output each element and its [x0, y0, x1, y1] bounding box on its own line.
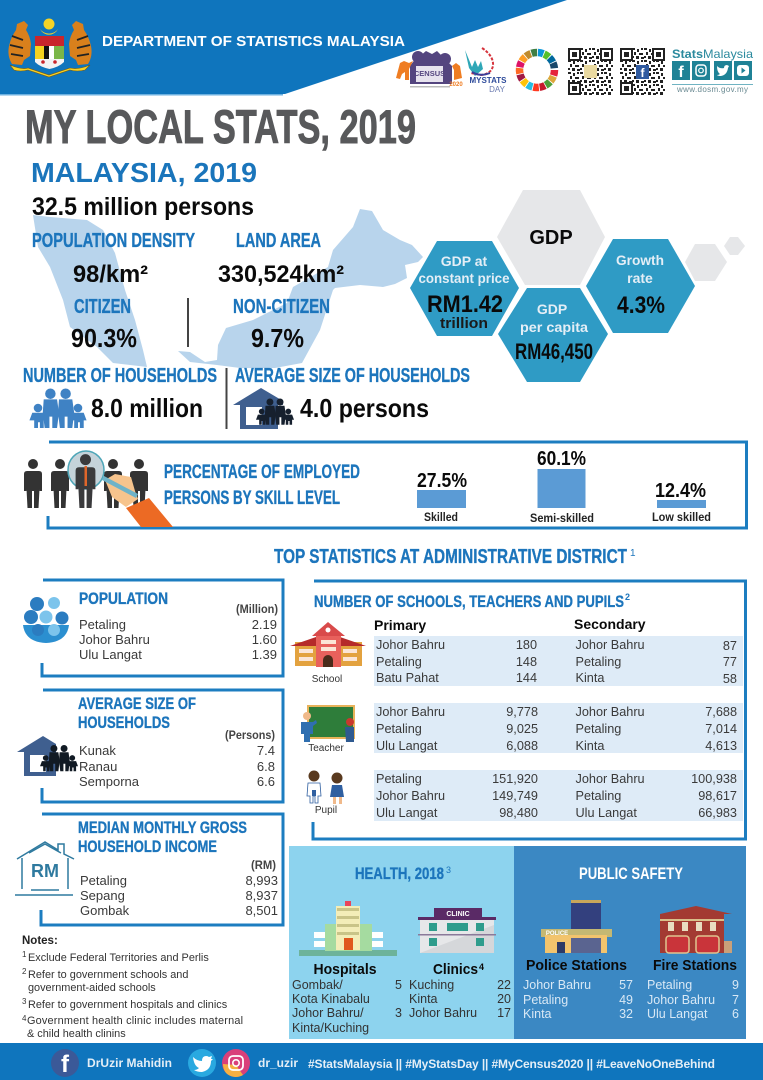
list: police stations: 32 [619, 1007, 633, 1021]
panel: average size of households: HOUSEHOLDS [78, 713, 170, 732]
data rows: Petaling [80, 873, 127, 888]
panel: schools, teachers and pupils: Secondary [574, 616, 646, 632]
notes [22, 935, 243, 1040]
list: hospitals: Kinta/Kuching [292, 1021, 369, 1035]
StatsMalaysia social block: f [678, 64, 684, 81]
hexagon: growth rate: rate [627, 270, 653, 286]
StatsMalaysia social block: StatsMalaysia [672, 47, 753, 61]
icon: RM house [15, 842, 74, 895]
icon: twitter [188, 1049, 216, 1077]
icon: school [290, 622, 366, 667]
bar: skilled [417, 470, 467, 524]
icon: house with family [233, 388, 294, 429]
icon: facebook: f [61, 1051, 70, 1078]
panel: median household income: HOUSEHOLD INCOME [78, 837, 217, 856]
list: police stations: Johor Bahru [523, 978, 591, 992]
table: schools: 58 [723, 672, 737, 686]
data rows: 8,937 [245, 888, 278, 903]
data rows: 6.6 [257, 774, 275, 789]
footer bar: DrUzir Mahidin [87, 1056, 172, 1070]
table: teachers: 6,088 [506, 739, 538, 753]
stat: land area [218, 230, 344, 288]
list: fire stations: 9 [732, 978, 739, 992]
icon: hospital [299, 901, 397, 956]
data rows: Ranau [79, 759, 117, 774]
panel: public safety: Police Stations [526, 957, 627, 974]
stat: number of households [23, 365, 217, 428]
stat: non-citizen [233, 296, 330, 353]
header logos [396, 45, 753, 95]
panel: average size of households: AVERAGE SIZE OF [78, 694, 196, 713]
table: teachers: 7,014 [705, 722, 737, 736]
table: teachers: Ulu Langat [376, 739, 438, 753]
notes: Government health clinic includes maternal [27, 1015, 243, 1027]
list: clinics: Kinta [409, 992, 438, 1006]
StatsMalaysia social block: www.dosm.gov.my [676, 85, 748, 94]
stat: number of households: 8.0 million [91, 393, 203, 423]
list: fire stations: 6 [732, 1007, 739, 1021]
table: teachers: Johor Bahru [376, 705, 445, 719]
bar: skilled: Skilled [424, 510, 458, 524]
bar: low skilled [652, 480, 711, 524]
panel: health: Hospitals [314, 961, 376, 978]
icon: MyStats Day logo: DAY [489, 85, 506, 94]
stat: population density [32, 230, 195, 288]
list: fire stations: Ulu Langat [647, 1007, 708, 1021]
data rows: 7.4 [257, 743, 275, 758]
list: fire stations: Johor Bahru [647, 993, 715, 1007]
population total: 32.5 million persons [32, 193, 254, 221]
panel: population: (Million) [236, 602, 278, 616]
hexagon: GDP title: GDP [529, 227, 573, 249]
table: pupils: 149,749 [492, 789, 538, 803]
table: schools: 180 [516, 638, 537, 652]
panel: schools, teachers and pupils: Primary [374, 617, 426, 633]
hexagon: GDP per capita [498, 288, 608, 382]
table: teachers [376, 705, 737, 753]
table: pupils: 98,480 [499, 806, 538, 820]
list: police stations: Kinta [523, 1007, 552, 1021]
data rows: 6.8 [257, 759, 275, 774]
notes: Refer to government schools and [28, 969, 188, 981]
bar: semi-skilled [530, 448, 594, 525]
heading: NUMBER OF SCHOOLS, TEACHERS AND PUPILS [314, 592, 624, 611]
list: clinics [409, 978, 511, 1020]
table: schools [376, 638, 737, 686]
panel: population [23, 580, 283, 676]
data rows [79, 743, 275, 789]
stat: citizen [71, 296, 137, 353]
list: clinics: 22 [497, 978, 511, 992]
hexagon: GDP title [497, 190, 605, 285]
stat: population density: POPULATION DENSITY [32, 230, 195, 252]
notes: 4 [22, 1014, 27, 1023]
list: fire stations: Petaling [647, 978, 692, 992]
icon: teacher [301, 705, 355, 742]
panel: average size of households [17, 690, 283, 802]
hexagon: GDP at constant price: trillion [440, 315, 488, 332]
hexagon: growth rate [586, 239, 695, 333]
heading: 2 [625, 592, 630, 602]
table: schools: Johor Bahru [576, 638, 645, 652]
panel: schools, teachers and pupils: Teacher [308, 743, 344, 754]
organisation name: DEPARTMENT OF STATISTICS MALAYSIA [102, 33, 405, 50]
data rows [80, 873, 278, 918]
hexagon: GDP at constant price: GDP at [441, 253, 488, 269]
list: police stations: 57 [619, 978, 633, 992]
stat: average size of households: 4.0 persons [300, 393, 429, 423]
hexagon: growth rate: Growth [616, 252, 664, 268]
stat: land area: LAND AREA [236, 230, 321, 252]
table: schools: 77 [723, 655, 737, 669]
list: clinics: Kuching [409, 978, 454, 992]
hexagon: GDP at constant price: RM1.42 [427, 291, 503, 318]
panel: median household income: (RM) [251, 858, 276, 872]
hexagon: GDP per capita: GDP [537, 301, 567, 317]
icon: fire station [660, 906, 732, 953]
icon: clinic: CLINIC [446, 911, 470, 918]
bar: low skilled: 12.4% [655, 480, 706, 502]
notes: Refer to government hospitals and clinics [28, 999, 228, 1011]
table: pupils: Petaling [576, 789, 621, 803]
table: schools: Petaling [576, 655, 621, 669]
data rows: Semporna [79, 774, 140, 789]
icon: police station [541, 900, 612, 953]
icon: RM house: RM [31, 861, 59, 881]
table: schools: Petaling [376, 655, 422, 669]
bar: low skilled: Low skilled [652, 510, 711, 524]
icon: national crest [8, 18, 92, 77]
panel: median household income [15, 814, 283, 925]
GDP hexagon cluster [410, 190, 745, 382]
panel: health [289, 846, 514, 1039]
notes: Notes: [22, 935, 58, 947]
list: hospitals: 3 [395, 1006, 402, 1020]
icon: QR code website [568, 48, 613, 95]
stat: citizen: 90.3% [71, 323, 137, 353]
table: pupils: 151,920 [492, 772, 538, 786]
table: pupils: Ulu Langat [576, 806, 637, 820]
list: police stations [523, 978, 633, 1021]
bar: semi-skilled: 60.1% [537, 448, 586, 470]
panel: schools, teachers and pupils [290, 581, 746, 839]
panel: schools, teachers and pupils: School [312, 674, 342, 685]
heading: PERSONS BY SKILL LEVEL [164, 488, 340, 509]
notes: 3 [22, 997, 27, 1006]
table: pupils [376, 772, 737, 820]
table: teachers: Petaling [376, 722, 422, 736]
footer bar: #StatsMalaysia || #MyStatsDay || #MyCensus2020 || #LeaveNoOneBehind [308, 1057, 715, 1071]
panel: average size of households: (Persons) [225, 728, 275, 742]
data rows: Sepang [80, 888, 125, 903]
StatsMalaysia social block [672, 47, 753, 94]
data rows: Petaling [79, 617, 126, 632]
heading: PERCENTAGE OF EMPLOYED [164, 462, 360, 483]
hexagon: GDP at constant price: constant price [418, 270, 510, 286]
table: schools: 87 [723, 639, 737, 653]
table: teachers: 4,613 [705, 739, 737, 753]
table: schools: Batu Pahat [376, 671, 439, 685]
bar chart [417, 448, 711, 525]
data rows: Johor Bahru [79, 632, 150, 647]
icon: house with family [17, 736, 78, 776]
map of Malaysia [33, 209, 423, 368]
data rows: Ulu Langat [79, 647, 142, 662]
hexagon: GDP per capita: per capita [520, 319, 588, 335]
table: teachers: 9,025 [506, 722, 538, 736]
table: schools: Johor Bahru [376, 638, 445, 652]
heading: HEALTH, 2018 [355, 864, 444, 883]
stat: citizen: CITIZEN [74, 296, 131, 318]
panel: public safety: PUBLIC SAFETY [579, 864, 684, 883]
data rows: 1.60 [252, 632, 277, 647]
heading [164, 462, 360, 509]
data rows: Kunak [79, 743, 116, 758]
table: pupils: Johor Bahru [376, 789, 445, 803]
icon: clinic [418, 908, 496, 953]
notes: & child health clinins [27, 1028, 126, 1040]
panel: median household income: MEDIAN MONTHLY GROSS [78, 818, 247, 837]
icon: police station: POLICE [546, 931, 568, 937]
panel: public safety [514, 846, 746, 1039]
list: police stations: 49 [619, 993, 633, 1007]
section heading: top statistics: 1 [630, 548, 636, 559]
stat: land area: 330,524km² [218, 261, 344, 288]
stat: average size of households [233, 365, 470, 429]
notes: Exclude Federal Territories and Perlis [28, 952, 209, 964]
icon: QR code facebook: f [640, 66, 646, 80]
stat: average size of households: AVERAGE SIZE OF HOUSEHOLDS [235, 365, 470, 387]
list: police stations: Petaling [523, 993, 568, 1007]
icon: MyStats Day logo [465, 48, 507, 94]
table: pupils: Ulu Langat [376, 806, 438, 820]
icon: MyStats Day logo: MYSTATS [469, 76, 507, 85]
icon: family [29, 388, 87, 428]
table: schools: 144 [516, 671, 537, 685]
stat: non-citizen: NON-CITIZEN [233, 296, 330, 318]
hexagon: growth rate: 4.3% [617, 292, 665, 319]
data rows: Gombak [80, 903, 130, 918]
table: pupils: 66,983 [698, 806, 737, 820]
list: clinics: 20 [497, 992, 511, 1006]
table: pupils: Johor Bahru [576, 772, 645, 786]
panel: employed persons by skill level [24, 442, 746, 528]
heading: 3 [446, 865, 451, 875]
table: teachers: Kinta [576, 739, 605, 753]
data rows: 8,501 [245, 903, 278, 918]
panel: health: Clinics [433, 961, 478, 978]
table: pupils: 98,617 [698, 789, 737, 803]
list: clinics: Johor Bahru [409, 1006, 477, 1020]
footer bar: dr_uzir [258, 1056, 298, 1070]
table: teachers: Johor Bahru [576, 705, 645, 719]
list: hospitals: Gombak/ [292, 978, 343, 992]
footer bar [0, 1043, 763, 1080]
heading: Malaysia 2019: MALAYSIA, 2019 [31, 157, 257, 188]
icon: crowd [23, 597, 69, 643]
header banner [0, 0, 567, 96]
stat: non-citizen: 9.7% [251, 323, 304, 353]
list: hospitals: 5 [395, 978, 402, 992]
icon: census logo [396, 51, 463, 88]
icon: pupils [307, 770, 344, 804]
panel: public safety: Fire Stations [653, 957, 737, 974]
bar: skilled: 27.5% [417, 470, 467, 492]
icon: SDG wheel [512, 45, 562, 95]
panel: population: POPULATION [79, 589, 168, 608]
list: hospitals: Kota Kinabalu [292, 992, 370, 1006]
bar: semi-skilled: Semi-skilled [530, 511, 594, 525]
icon: facebook [51, 1049, 79, 1078]
title: MY LOCAL STATS, 2019 [25, 100, 416, 153]
list: clinics: 17 [497, 1006, 511, 1020]
stat: population density: 98/km² [73, 261, 148, 288]
panel: health: 4 [479, 962, 484, 972]
icon: instagram [222, 1049, 250, 1077]
table: pupils: 100,938 [691, 772, 737, 786]
hexagon: GDP per capita: RM46,450 [515, 339, 593, 364]
notes: government-aided schools [28, 982, 156, 994]
icon: census logo: CENSUS [414, 69, 445, 78]
panel: schools, teachers and pupils: Pupil [315, 805, 337, 816]
data rows [79, 617, 277, 662]
notes: 1 [22, 950, 27, 959]
hexagon: GDP at constant price [410, 241, 519, 336]
stat: number of households: NUMBER OF HOUSEHOLDS [23, 365, 217, 387]
notes: 2 [22, 967, 27, 976]
table: teachers: Petaling [576, 722, 621, 736]
list: hospitals: Johor Bahru/ [292, 1006, 364, 1020]
table: teachers: 7,688 [705, 705, 737, 719]
table: pupils: Petaling [376, 772, 422, 786]
list: hospitals [292, 978, 402, 1035]
data rows: 2.19 [252, 617, 277, 632]
table: teachers: 9,778 [506, 705, 538, 719]
icon: people with magnifier and hand [24, 451, 173, 527]
data rows: 8,993 [245, 873, 278, 888]
section heading: top statistics: TOP STATISTICS AT ADMINISTRATIVE DISTRICT [274, 546, 627, 568]
icon: QR code facebook [620, 48, 665, 95]
list: fire stations: 7 [732, 993, 739, 1007]
list: fire stations [647, 978, 739, 1021]
data rows: 1.39 [252, 647, 277, 662]
icon: census logo: 2020 [449, 82, 463, 88]
table: schools: Kinta [576, 671, 605, 685]
table: schools: 148 [516, 655, 537, 669]
